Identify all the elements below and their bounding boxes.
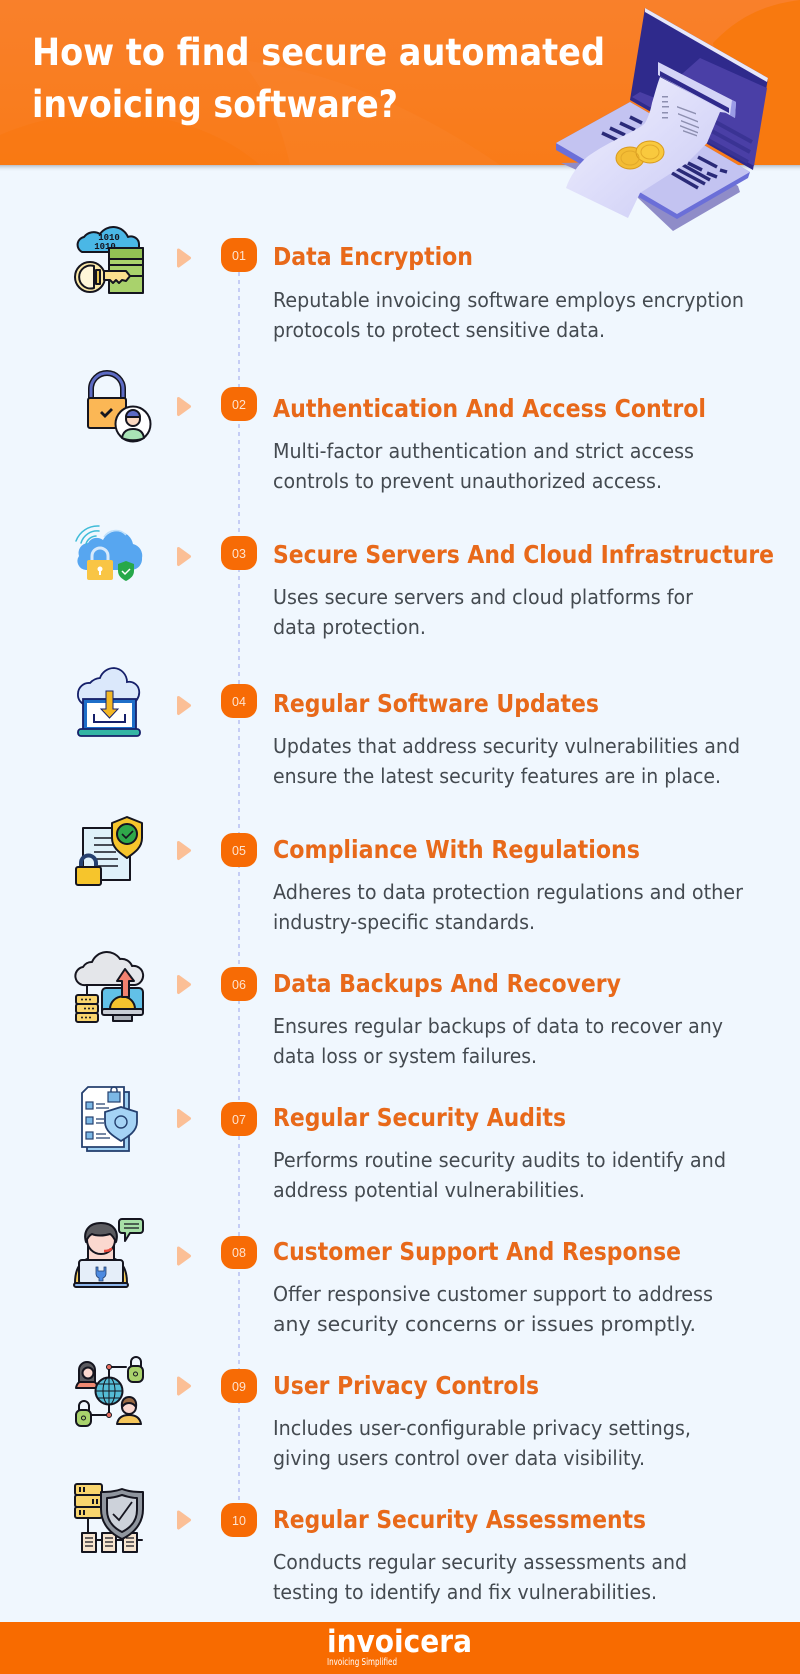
number badge 05 — [221, 833, 257, 867]
heading: Regular Security Audits — [273, 1103, 566, 1132]
description: ensure the latest security features are in place. — [273, 764, 721, 788]
description — [273, 585, 694, 639]
icon: users, globe and locks — [76, 1357, 143, 1426]
arrow — [178, 398, 190, 414]
description: Ensures regular backups of data to recover any — [273, 1014, 723, 1038]
item 03: secure servers — [76, 526, 774, 639]
number badge 01: 01 — [232, 249, 246, 263]
icon: servers and shield — [75, 1484, 143, 1552]
description: giving users control over data visibility. — [273, 1446, 645, 1470]
heading: Data Backups And Recovery — [273, 969, 621, 998]
arrow — [178, 1512, 190, 1528]
description: any security concerns or issues promptly. — [273, 1312, 696, 1336]
description: Includes user-configurable privacy settings, — [273, 1416, 691, 1440]
icon: cloud, servers and monitor — [75, 952, 143, 1022]
item 04: software updates — [78, 668, 740, 788]
icon: support agent at laptop — [74, 1219, 143, 1287]
item 10: security assessments — [75, 1484, 687, 1604]
icon: cloud download on laptop — [78, 668, 140, 736]
number badge 09: 09 — [232, 1380, 246, 1394]
item 09: privacy controls — [76, 1357, 691, 1470]
heading: Regular Software Updates — [273, 689, 599, 718]
footer logo: invoicera — [327, 1624, 472, 1660]
icon: cloud with lock and shield — [76, 526, 142, 581]
description: Performs routine security audits to identify and — [273, 1148, 726, 1172]
heading: Compliance With Regulations — [273, 835, 640, 864]
number badge 03: 03 — [232, 547, 246, 561]
arrow — [178, 1248, 190, 1264]
footer logo: Invoicing Simplified — [327, 1657, 397, 1668]
description: Conducts regular security assessments and — [273, 1550, 687, 1574]
item 08: customer support — [74, 1219, 713, 1336]
item 02: authentication — [88, 373, 706, 493]
icon: document, shield and lock — [76, 817, 142, 885]
number badge 10 — [221, 1503, 257, 1537]
description — [273, 734, 740, 788]
heading: Authentication And Access Control — [273, 394, 706, 423]
arrow — [178, 1378, 190, 1394]
item 06: backups — [75, 952, 723, 1068]
number badge 09 — [221, 1369, 257, 1403]
heading: Data Encryption — [273, 242, 473, 271]
description: Updates that address security vulnerabilities and — [273, 734, 740, 758]
description — [273, 1014, 723, 1068]
description: Multi-factor authentication and strict access — [273, 439, 694, 463]
description: protocols to protect sensitive data. — [273, 318, 605, 342]
heading: Regular Security Assessments — [273, 1505, 646, 1534]
number badge 05: 05 — [232, 844, 246, 858]
description — [273, 880, 744, 934]
description — [273, 1282, 713, 1336]
item 07: audits — [82, 1087, 726, 1202]
number badge 10: 10 — [232, 1514, 246, 1528]
description: Offer responsive customer support to address — [273, 1282, 713, 1306]
description: industry-specific standards. — [273, 910, 535, 934]
arrow — [178, 250, 190, 266]
description: data protection. — [273, 615, 426, 639]
description — [273, 1550, 687, 1604]
number badge 02 — [221, 387, 257, 421]
number badge 06: 06 — [232, 978, 246, 992]
title: How to find secure automated — [32, 31, 605, 74]
heading: User Privacy Controls — [273, 1371, 539, 1400]
number badge 01 — [221, 238, 257, 272]
icon: cloud, database and key: 1010 — [94, 242, 116, 252]
number badge 02: 02 — [232, 398, 246, 412]
footer bar — [0, 1622, 800, 1674]
icon: cloud, database and key: 1010 — [98, 233, 120, 243]
description: Reputable invoicing software employs encryption — [273, 288, 744, 312]
number badge 03 — [221, 536, 257, 570]
icon: cloud, database and key — [75, 227, 143, 293]
description: Adheres to data protection regulations and other — [273, 880, 744, 904]
arrow — [178, 976, 190, 992]
title — [32, 31, 605, 126]
description: Uses secure servers and cloud platforms for — [273, 585, 694, 609]
description — [273, 439, 694, 493]
description: controls to prevent unauthorized access. — [273, 469, 662, 493]
item 05: compliance — [76, 817, 744, 934]
number badge 08 — [221, 1236, 257, 1269]
arrow — [178, 548, 190, 564]
arrow — [178, 698, 190, 714]
arrow — [178, 842, 190, 858]
number badge 04 — [221, 684, 257, 718]
number badge 07 — [221, 1102, 257, 1136]
heading: Customer Support And Response — [273, 1237, 681, 1266]
icon: checklist and shield — [82, 1087, 137, 1151]
timeline dashed line — [238, 272, 240, 1504]
description: testing to identify and fix vulnerabilities. — [273, 1580, 657, 1604]
description: data loss or system failures. — [273, 1044, 537, 1068]
description: address potential vulnerabilities. — [273, 1178, 585, 1202]
description — [273, 1416, 691, 1470]
description — [273, 1148, 726, 1202]
number badge 07: 07 — [232, 1113, 246, 1127]
icon: padlock and user — [88, 373, 150, 442]
illustration: laptop printing an invoice — [556, 8, 768, 231]
number badge 08: 08 — [232, 1246, 246, 1260]
item 01: data encryption — [75, 227, 744, 342]
description — [273, 288, 744, 342]
title: invoicing software? — [32, 83, 398, 126]
header banner — [0, 0, 800, 172]
number badge 04: 04 — [232, 695, 246, 709]
number badge 06 — [221, 967, 257, 1001]
arrow — [178, 1110, 190, 1126]
